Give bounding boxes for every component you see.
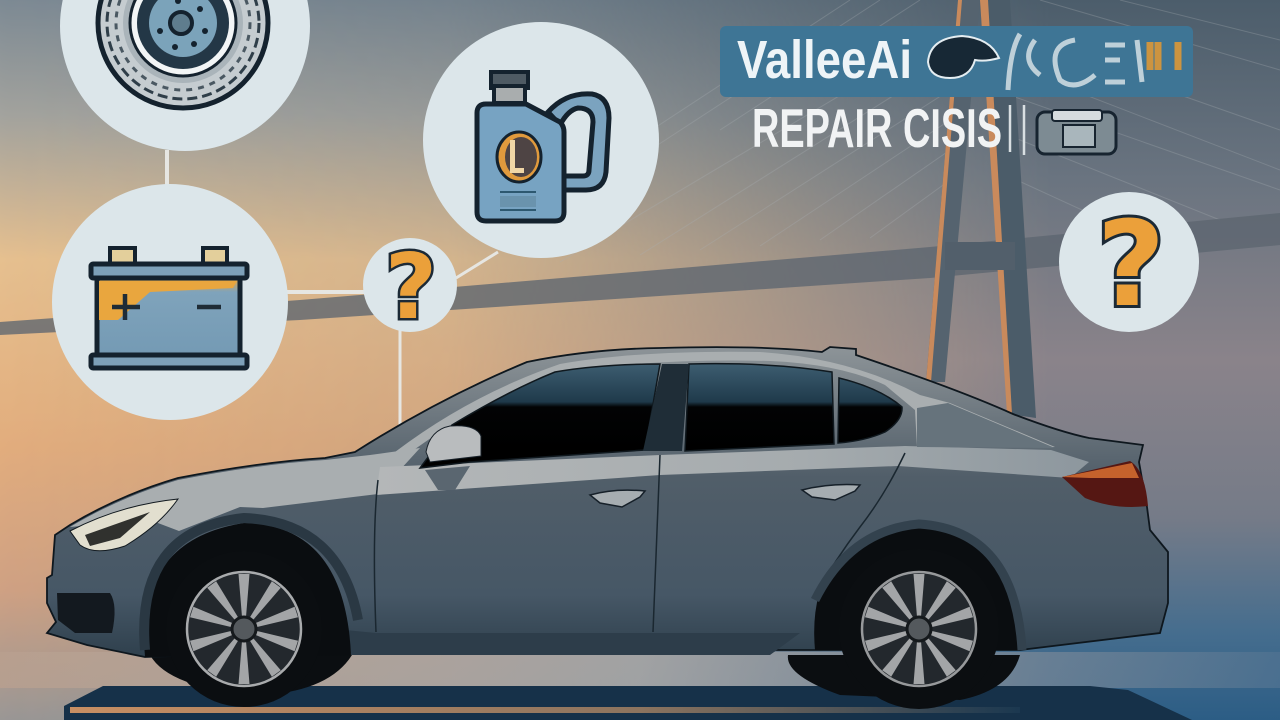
c-pillar shade <box>917 403 1055 448</box>
headlight <box>70 499 178 551</box>
icon circle: battery <box>52 184 288 420</box>
mirror shadow on door <box>425 466 470 490</box>
bridge in the background <box>0 0 1280 418</box>
icon circle: large question mark: ? <box>1097 195 1165 333</box>
lower sill <box>345 630 800 655</box>
banner icon: mechanic glyph <box>928 36 999 78</box>
icon circle: large question mark <box>1059 192 1199 333</box>
icon circle: oil jug <box>423 22 659 258</box>
tire shadows under the body <box>150 655 1020 700</box>
title text: ValleeAi <box>737 30 912 90</box>
icon circle: tire <box>60 0 310 151</box>
title banner <box>720 26 1193 97</box>
door seams <box>374 453 905 632</box>
connector lines between icon circles <box>167 150 498 428</box>
car <box>47 347 1168 709</box>
platform <box>64 686 1192 720</box>
front window <box>420 364 660 468</box>
taillight <box>1062 461 1148 507</box>
quarter window <box>838 378 902 443</box>
front bumper intake <box>57 593 115 633</box>
rear window <box>685 364 834 451</box>
roof highlight <box>395 352 1055 460</box>
shoulder light band <box>376 446 1089 495</box>
door handles <box>590 485 860 507</box>
subtitle text: REPAIR CISIS <box>752 97 1002 159</box>
ground band <box>0 652 1280 688</box>
wheel arches <box>144 523 351 657</box>
side mirror <box>426 426 481 462</box>
icon circle: small question mark: ? <box>385 235 437 340</box>
icon circle: small question mark <box>363 235 457 340</box>
car body <box>47 347 1168 657</box>
front wheel <box>166 551 322 707</box>
garbled banner lettering <box>1008 34 1178 90</box>
b-pillar <box>643 364 689 451</box>
subtitle icon: engine box <box>1037 110 1116 154</box>
rear wheel <box>839 549 999 709</box>
hood highlight <box>70 448 420 531</box>
